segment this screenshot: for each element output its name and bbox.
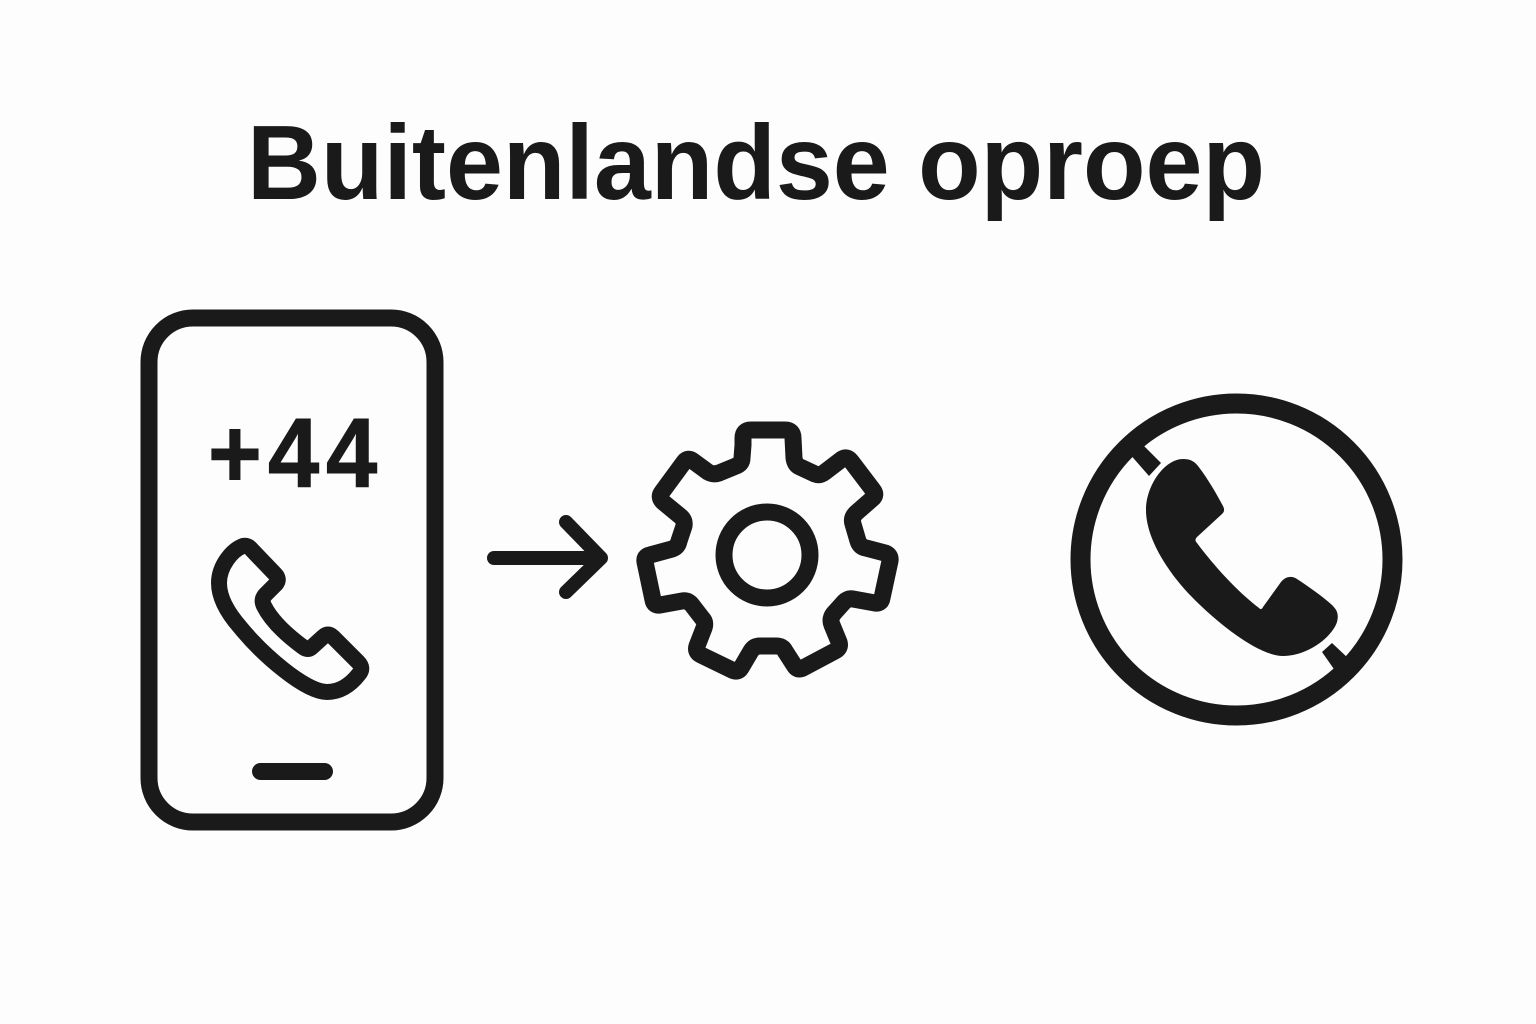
country code: +44 [208,399,377,509]
icon: smartphone with country code [149,318,435,822]
ring notch ticks [1128,436,1358,678]
phone body [149,318,435,822]
icon: handset in circle [1080,404,1392,716]
home bar [252,763,333,780]
gear outline [645,430,890,671]
gear hub [724,512,810,598]
arrow [494,522,601,592]
circle ring [1080,404,1392,716]
solid handset [1146,459,1338,656]
icon: gear [645,430,890,671]
icon: outlined handset [219,546,361,692]
title: Buitenlandse oproep [247,104,1265,222]
